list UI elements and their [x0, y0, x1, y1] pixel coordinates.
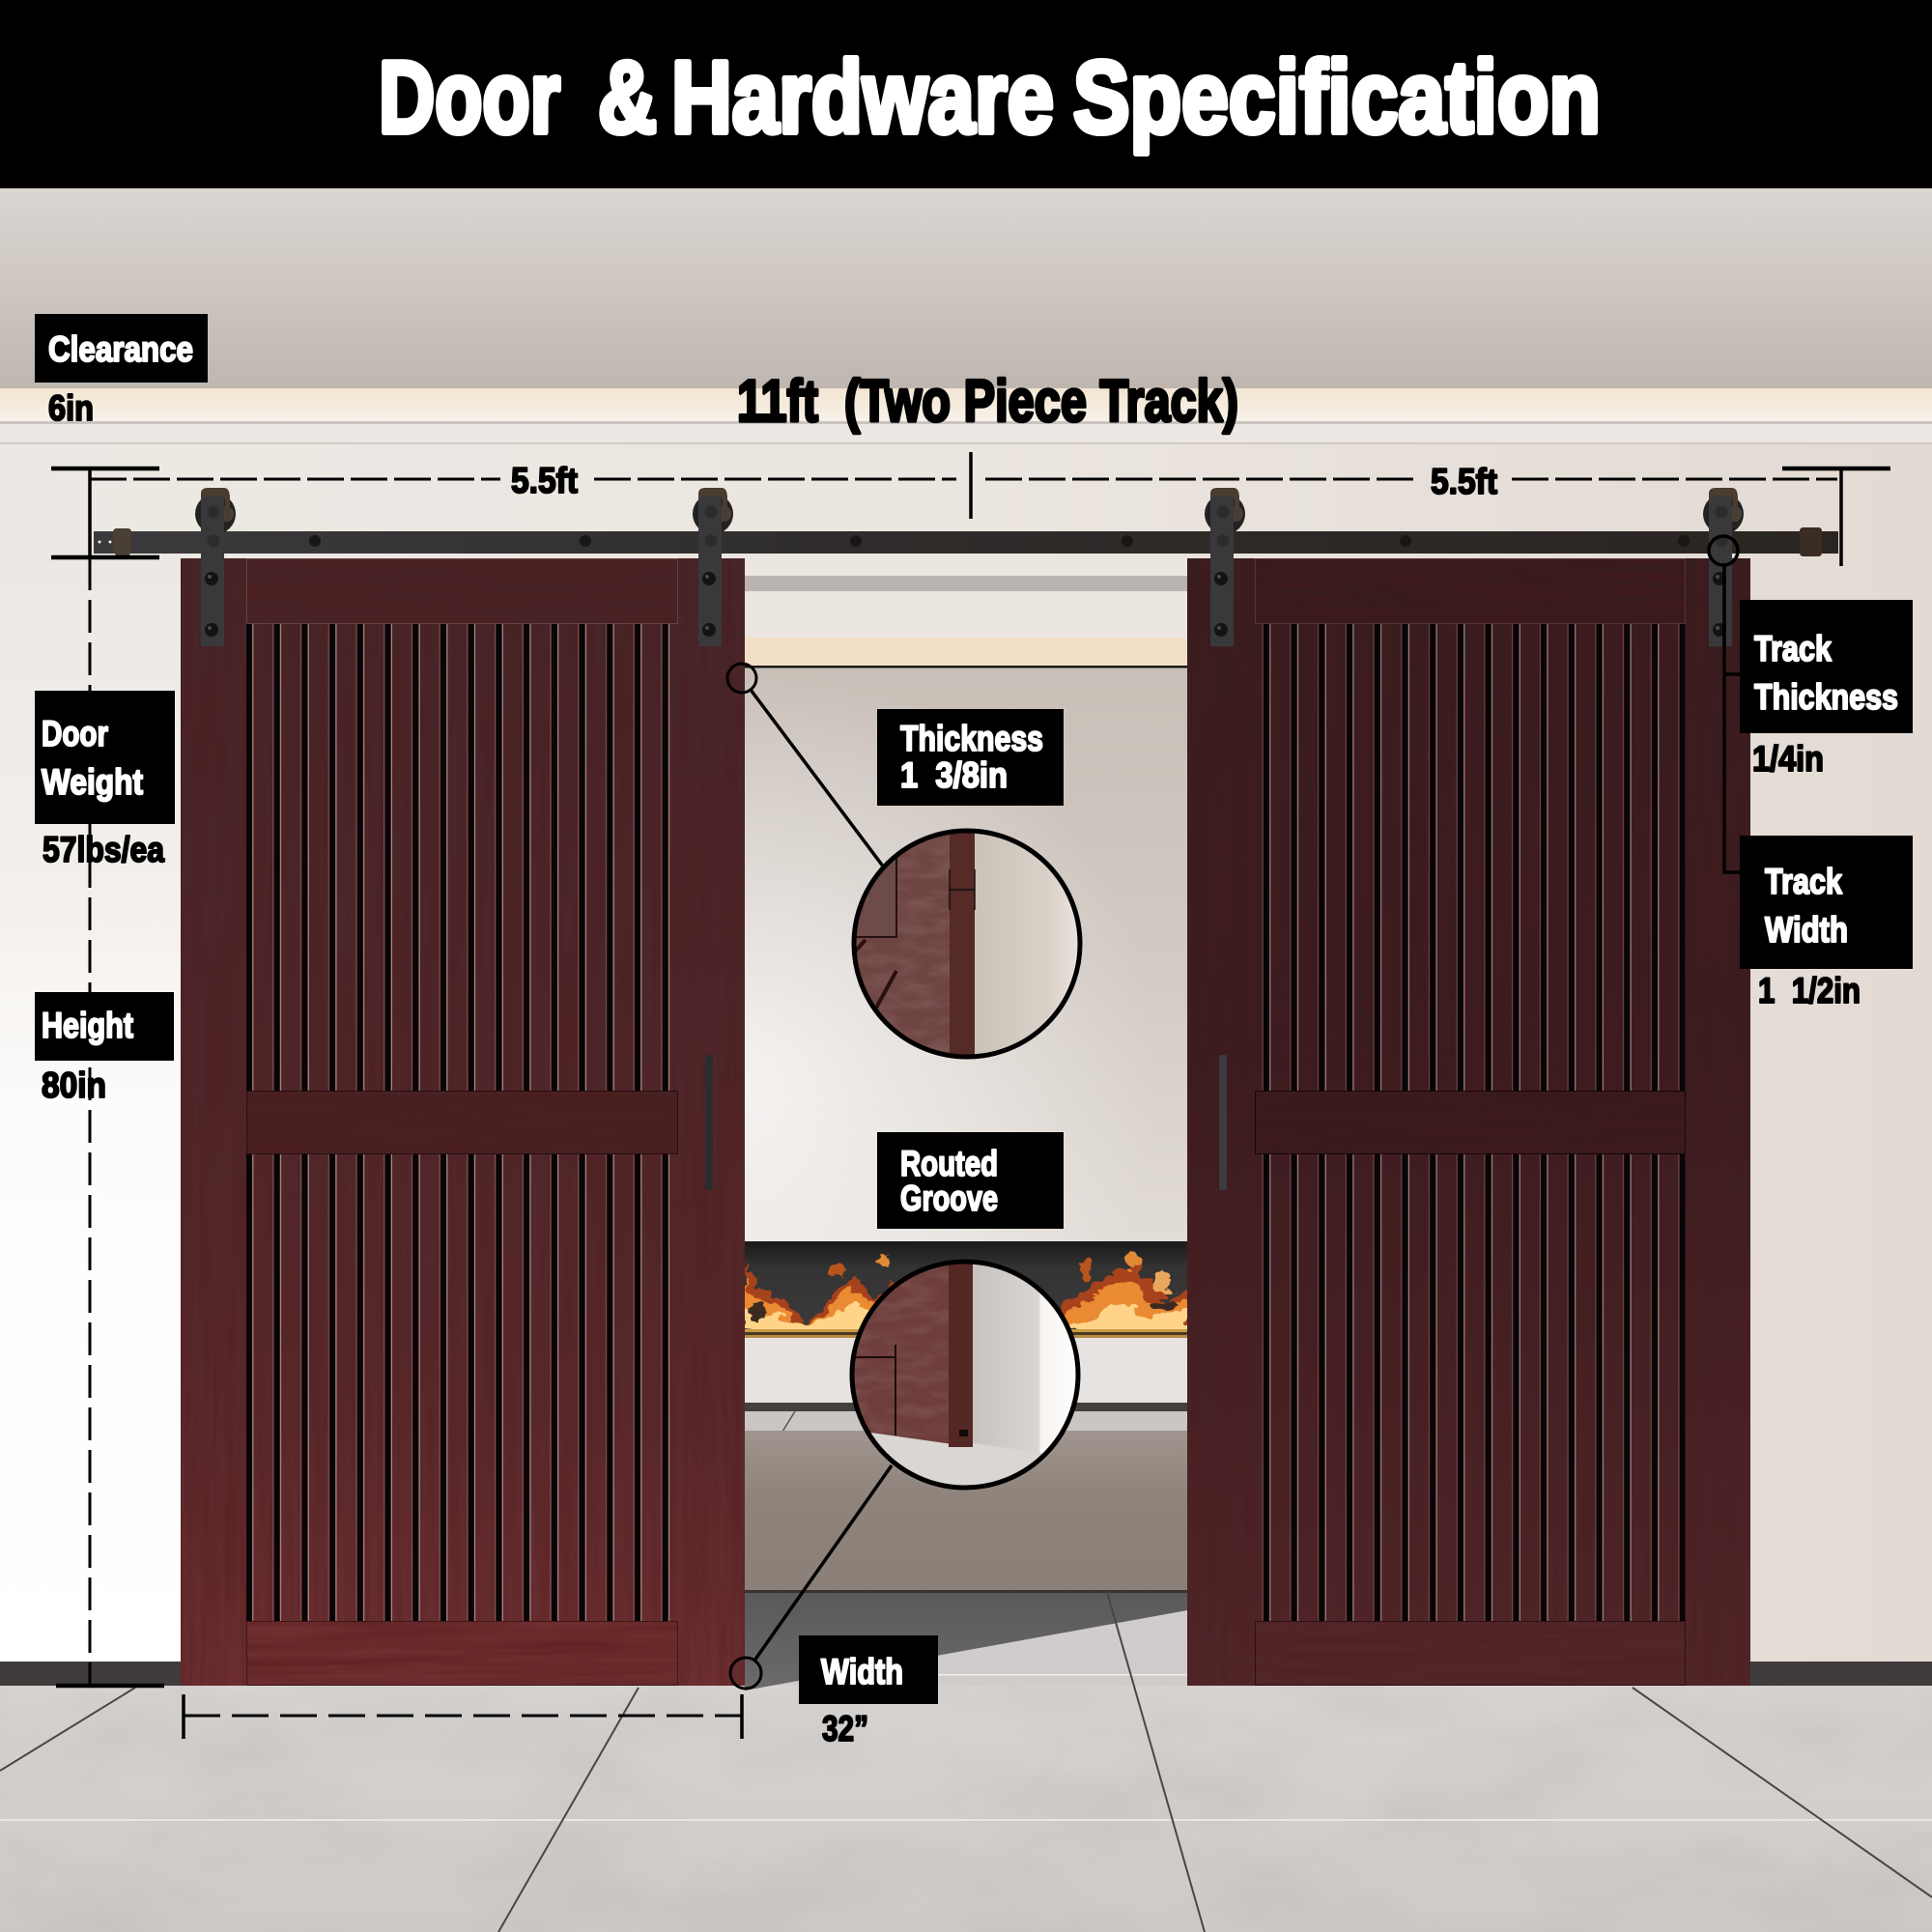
label: right 5.5ft: 5.5ft: [1431, 462, 1497, 501]
callout: track thickness: [1740, 600, 1913, 779]
leader line: width marker to groove circle: [730, 1465, 892, 1689]
right door upper slats: [1255, 624, 1686, 1091]
heading: track length: 11ft (Two Piece Track): [737, 368, 1238, 434]
hanger 4: [1703, 488, 1744, 646]
title bar: [0, 0, 1932, 188]
callout: width: Width: [821, 1652, 903, 1691]
left door upper slats: [246, 624, 678, 1091]
door handle: right door: [1219, 1055, 1227, 1190]
track leader lines: [1709, 536, 1740, 872]
callout: door weight: Weight: [42, 762, 143, 802]
fireplace flames: [745, 1254, 1190, 1333]
floor: [0, 1686, 1932, 1932]
title bar: Specification: [1073, 41, 1601, 155]
right door middle rail: [1255, 1091, 1686, 1154]
hanger 2: [693, 488, 733, 646]
barn door track with bolts and stoppers: [94, 527, 1838, 556]
callout: door weight: Door: [42, 714, 108, 753]
left door middle rail: [246, 1091, 678, 1154]
callout: clearance: [35, 314, 208, 428]
hanger 1: [195, 488, 236, 646]
callout: height: Height: [42, 1006, 133, 1045]
callout: track width: Track: [1765, 862, 1842, 901]
callout: height: 80in: [42, 1065, 106, 1105]
right door bottom rail: [1255, 1621, 1686, 1686]
callout: routed groove: [877, 1132, 1064, 1229]
callout: thickness: 1 3/8in: [900, 755, 1008, 795]
left door lower slats: [246, 1154, 678, 1621]
callout: clearance: Clearance: [48, 329, 193, 369]
callout: track width: [1740, 836, 1913, 1010]
hanger 3: [1205, 488, 1245, 646]
callout: routed groove: Routed: [900, 1144, 998, 1183]
left door: [181, 558, 745, 1686]
floor tile joints: [0, 1592, 1932, 1932]
callout: height: [35, 992, 174, 1105]
left door top rail: [246, 558, 678, 624]
detail circle: door thickness: [854, 831, 1095, 1058]
label: left 5.5ft: 5.5ft: [511, 461, 578, 500]
callout: track width: Width: [1765, 910, 1848, 950]
callout: door weight: [35, 691, 175, 869]
callout: width: 32”: [822, 1709, 868, 1748]
title bar: &: [598, 41, 657, 155]
title bar: Door: [379, 41, 560, 155]
callout: track thickness: Track: [1754, 629, 1832, 668]
callout: track thickness: Thickness: [1754, 677, 1898, 717]
right door top rail: [1255, 558, 1686, 624]
left door bottom rail: [246, 1621, 678, 1686]
callout: width: [799, 1635, 938, 1748]
right door: [1187, 558, 1750, 1686]
right door lower slats: [1255, 1154, 1686, 1621]
callout: door weight: 57lbs/ea: [43, 830, 164, 869]
background: room ceiling, cove light and wall: [0, 188, 1932, 1686]
callout: track thickness: 1/4in: [1752, 739, 1824, 779]
view through opening: back room: [745, 558, 1187, 1690]
callout: track width: 1 1/2in: [1758, 971, 1861, 1010]
door handle: left door: [705, 1055, 713, 1190]
leader line: thickness marker to detail circle: [727, 664, 884, 867]
callout: thickness: Thickness: [900, 719, 1043, 758]
height dimension line: [56, 557, 164, 1686]
title bar: Hardware: [671, 41, 1054, 155]
callout: clearance: 6in: [48, 388, 94, 428]
callout: thickness: [877, 709, 1064, 806]
width dimension line: [184, 1694, 742, 1739]
callout: routed groove: Groove: [900, 1179, 998, 1218]
detail circle: routed groove: [850, 1262, 1082, 1492]
track length dimension lines: [51, 452, 1890, 566]
